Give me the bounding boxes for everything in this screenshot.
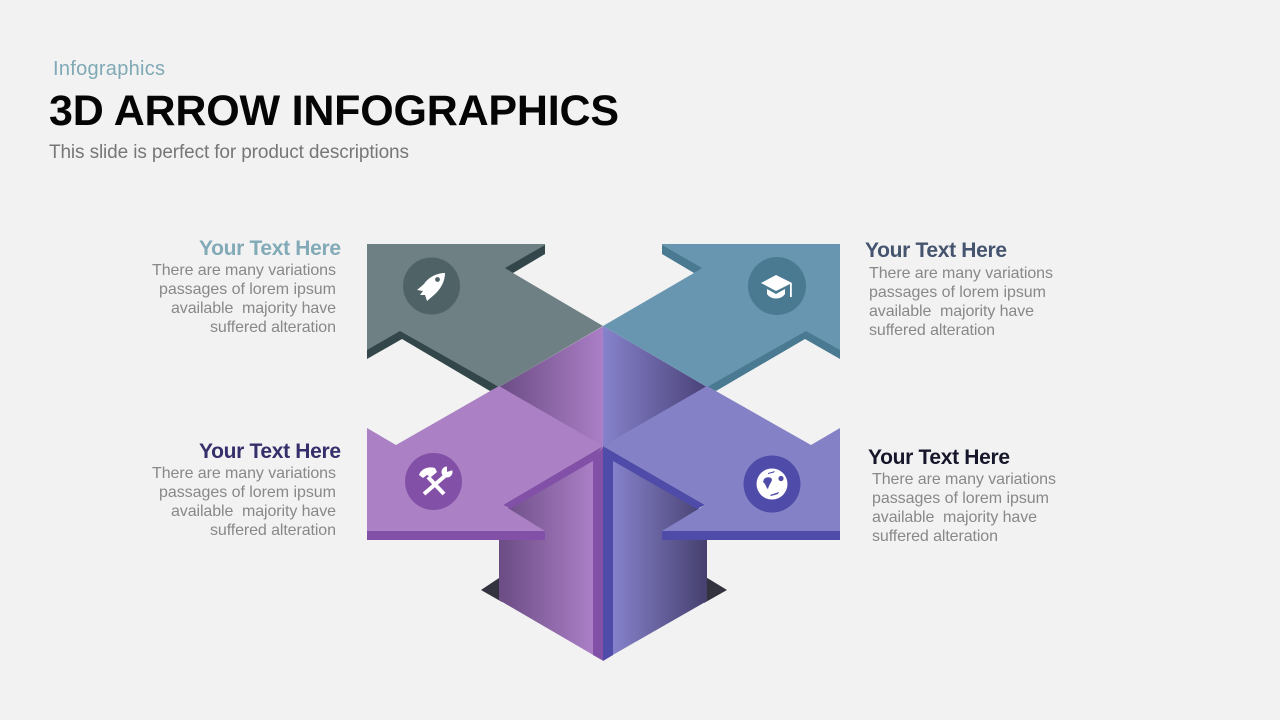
text block: lower-right: suffered alteration <box>872 528 998 545</box>
text block: lower-right: Your Text Here <box>868 446 1010 469</box>
text block: top-right: passages of lorem ipsum <box>869 284 1046 301</box>
eyebrow label: Infographics <box>53 58 165 80</box>
centre facet left <box>499 326 604 447</box>
text block: lower-right: passages of lorem ipsum <box>872 490 1049 507</box>
arrow: lower-right indigo <box>603 386 840 540</box>
subtitle: This slide is perfect for product descriptions <box>49 142 409 163</box>
text block: lower-left: suffered alteration <box>210 522 336 539</box>
text block: lower-right: available majority have <box>872 509 1037 526</box>
text block: top-left: Your Text Here <box>199 237 341 260</box>
text block: top-right: suffered alteration <box>869 322 995 339</box>
text block: lower-left: Your Text Here <box>199 440 341 463</box>
arrow: lower-right shaft <box>611 459 707 656</box>
text block: lower-right: There are many variations <box>872 471 1056 488</box>
centre bar right <box>603 446 613 661</box>
text block: top-left: available majority have <box>171 300 336 317</box>
text block: lower-left: passages of lorem ipsum <box>159 484 336 501</box>
text block: top-right: Your Text Here <box>865 239 1007 262</box>
text block: top-left: suffered alteration <box>210 319 336 336</box>
text block: top-right: available majority have <box>869 303 1034 320</box>
centre bar left <box>593 446 604 661</box>
text block: lower-left <box>152 440 341 539</box>
text block: top-right <box>865 239 1053 339</box>
text block: top-left: There are many variations <box>152 262 336 279</box>
centre facet right <box>603 326 707 447</box>
title: 3D ARROW INFOGRAPHICS <box>49 87 619 135</box>
text block: lower-left: There are many variations <box>152 465 336 482</box>
arrow: top-right blue <box>603 244 840 391</box>
arrow: lower-left shaft <box>499 459 595 656</box>
3D arrow graphic <box>367 244 840 661</box>
icon: tools <box>405 453 462 510</box>
icon: graduation cap <box>748 257 806 315</box>
text block: top-left <box>152 237 341 336</box>
icon: globe <box>744 456 800 512</box>
text block: lower-right <box>868 446 1056 545</box>
text block: top-right: There are many variations <box>869 265 1053 282</box>
arrow: top-left grey <box>367 244 603 391</box>
text block: lower-left: available majority have <box>171 503 336 520</box>
shadow triangle left <box>481 576 502 602</box>
shadow triangle right <box>704 576 727 603</box>
text block: top-left: passages of lorem ipsum <box>159 281 336 298</box>
icon: rocket <box>403 258 460 314</box>
arrow: lower-left purple <box>367 386 603 540</box>
